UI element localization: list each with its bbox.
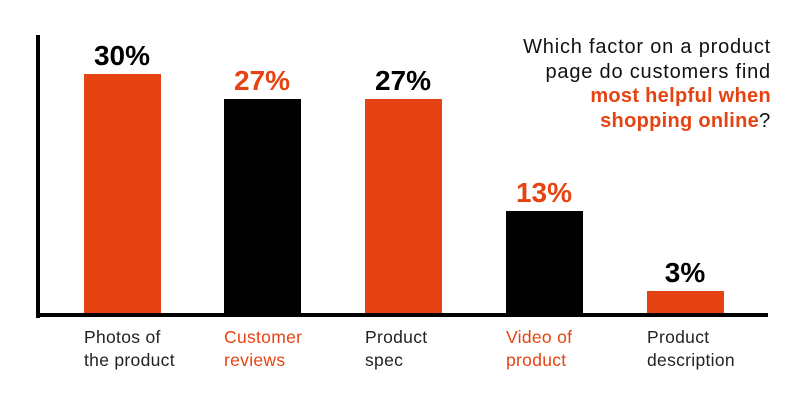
- label: photos: [84, 327, 175, 370]
- bar: video 13%: [506, 211, 583, 313]
- label: description: description: [647, 350, 735, 370]
- bar: photos 30%: [84, 74, 161, 313]
- bar: product spec 27%: [365, 99, 442, 313]
- value: 3%: 3%: [665, 257, 705, 288]
- title question: page do customers find: [545, 60, 771, 82]
- x axis: [36, 313, 768, 317]
- title question: [523, 36, 771, 132]
- value: 27%: 27%: [234, 65, 290, 96]
- label: photos: the product: [84, 350, 175, 370]
- y axis: [36, 35, 40, 318]
- label: customer reviews: reviews: [224, 350, 285, 370]
- label: video: product: [506, 350, 566, 370]
- value: 13%: 13%: [516, 177, 572, 208]
- label: description: Product: [647, 327, 709, 347]
- label: product spec: [365, 327, 427, 370]
- label: customer reviews: Customer: [224, 327, 302, 347]
- title question: shopping online?: [600, 110, 771, 132]
- label: description: [647, 327, 735, 370]
- label: video: [506, 327, 572, 370]
- label: video: Video of: [506, 327, 572, 347]
- label: product spec: Product: [365, 327, 427, 347]
- label: customer reviews: [224, 327, 302, 370]
- value: 30%: 30%: [94, 40, 150, 71]
- title question: Which factor on a product: [523, 36, 771, 58]
- bar: description 3%: [647, 291, 724, 313]
- title question: most helpful when: [590, 85, 771, 107]
- bar: customer reviews 27%: [224, 99, 301, 313]
- label: product spec: spec: [365, 350, 403, 370]
- label: photos: Photos of: [84, 327, 161, 347]
- value: 27% spec: 27%: [375, 65, 431, 96]
